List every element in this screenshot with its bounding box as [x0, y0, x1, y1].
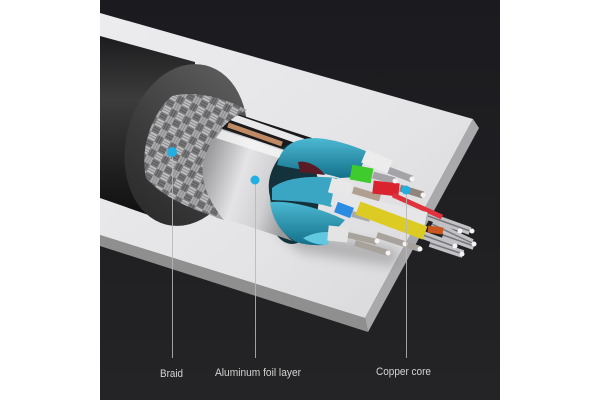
marker: copper core	[402, 186, 410, 194]
foil top highlight	[216, 130, 284, 158]
dark cavity behind wires	[265, 144, 319, 244]
cable shadow on plate	[274, 235, 402, 270]
label: aluminum foil layer: Aluminum foil layer	[215, 367, 301, 379]
blue foil wrapped pairs	[270, 138, 368, 245]
label: braid: Braid	[160, 368, 183, 380]
braid	[144, 94, 247, 220]
wire tips	[374, 176, 476, 256]
infographic: cable cross-section	[100, 0, 500, 400]
strands: rear	[423, 216, 474, 254]
label: copper core: Copper core	[376, 366, 431, 378]
inner silver tube and copper strand	[222, 114, 312, 148]
photo panel background	[100, 0, 500, 400]
blue wire sleeve	[336, 207, 352, 213]
aluminum foil layer	[202, 128, 293, 241]
copper core wires	[328, 156, 474, 254]
marker: foil	[250, 176, 260, 184]
yellow wire	[358, 208, 425, 233]
marker: braid	[167, 147, 177, 157]
orange wire	[428, 229, 443, 231]
red wire	[373, 187, 399, 190]
white wire middle sleeve	[330, 185, 351, 191]
white wire lower sleeve	[328, 233, 348, 235]
white plate	[100, 13, 479, 332]
leader lines	[172, 151, 406, 358]
green wire sleeve	[351, 172, 372, 176]
cable black jacket	[100, 36, 246, 226]
long white wire	[332, 198, 426, 219]
jacket end ring	[124, 64, 246, 226]
white wire top sleeve	[364, 156, 390, 167]
